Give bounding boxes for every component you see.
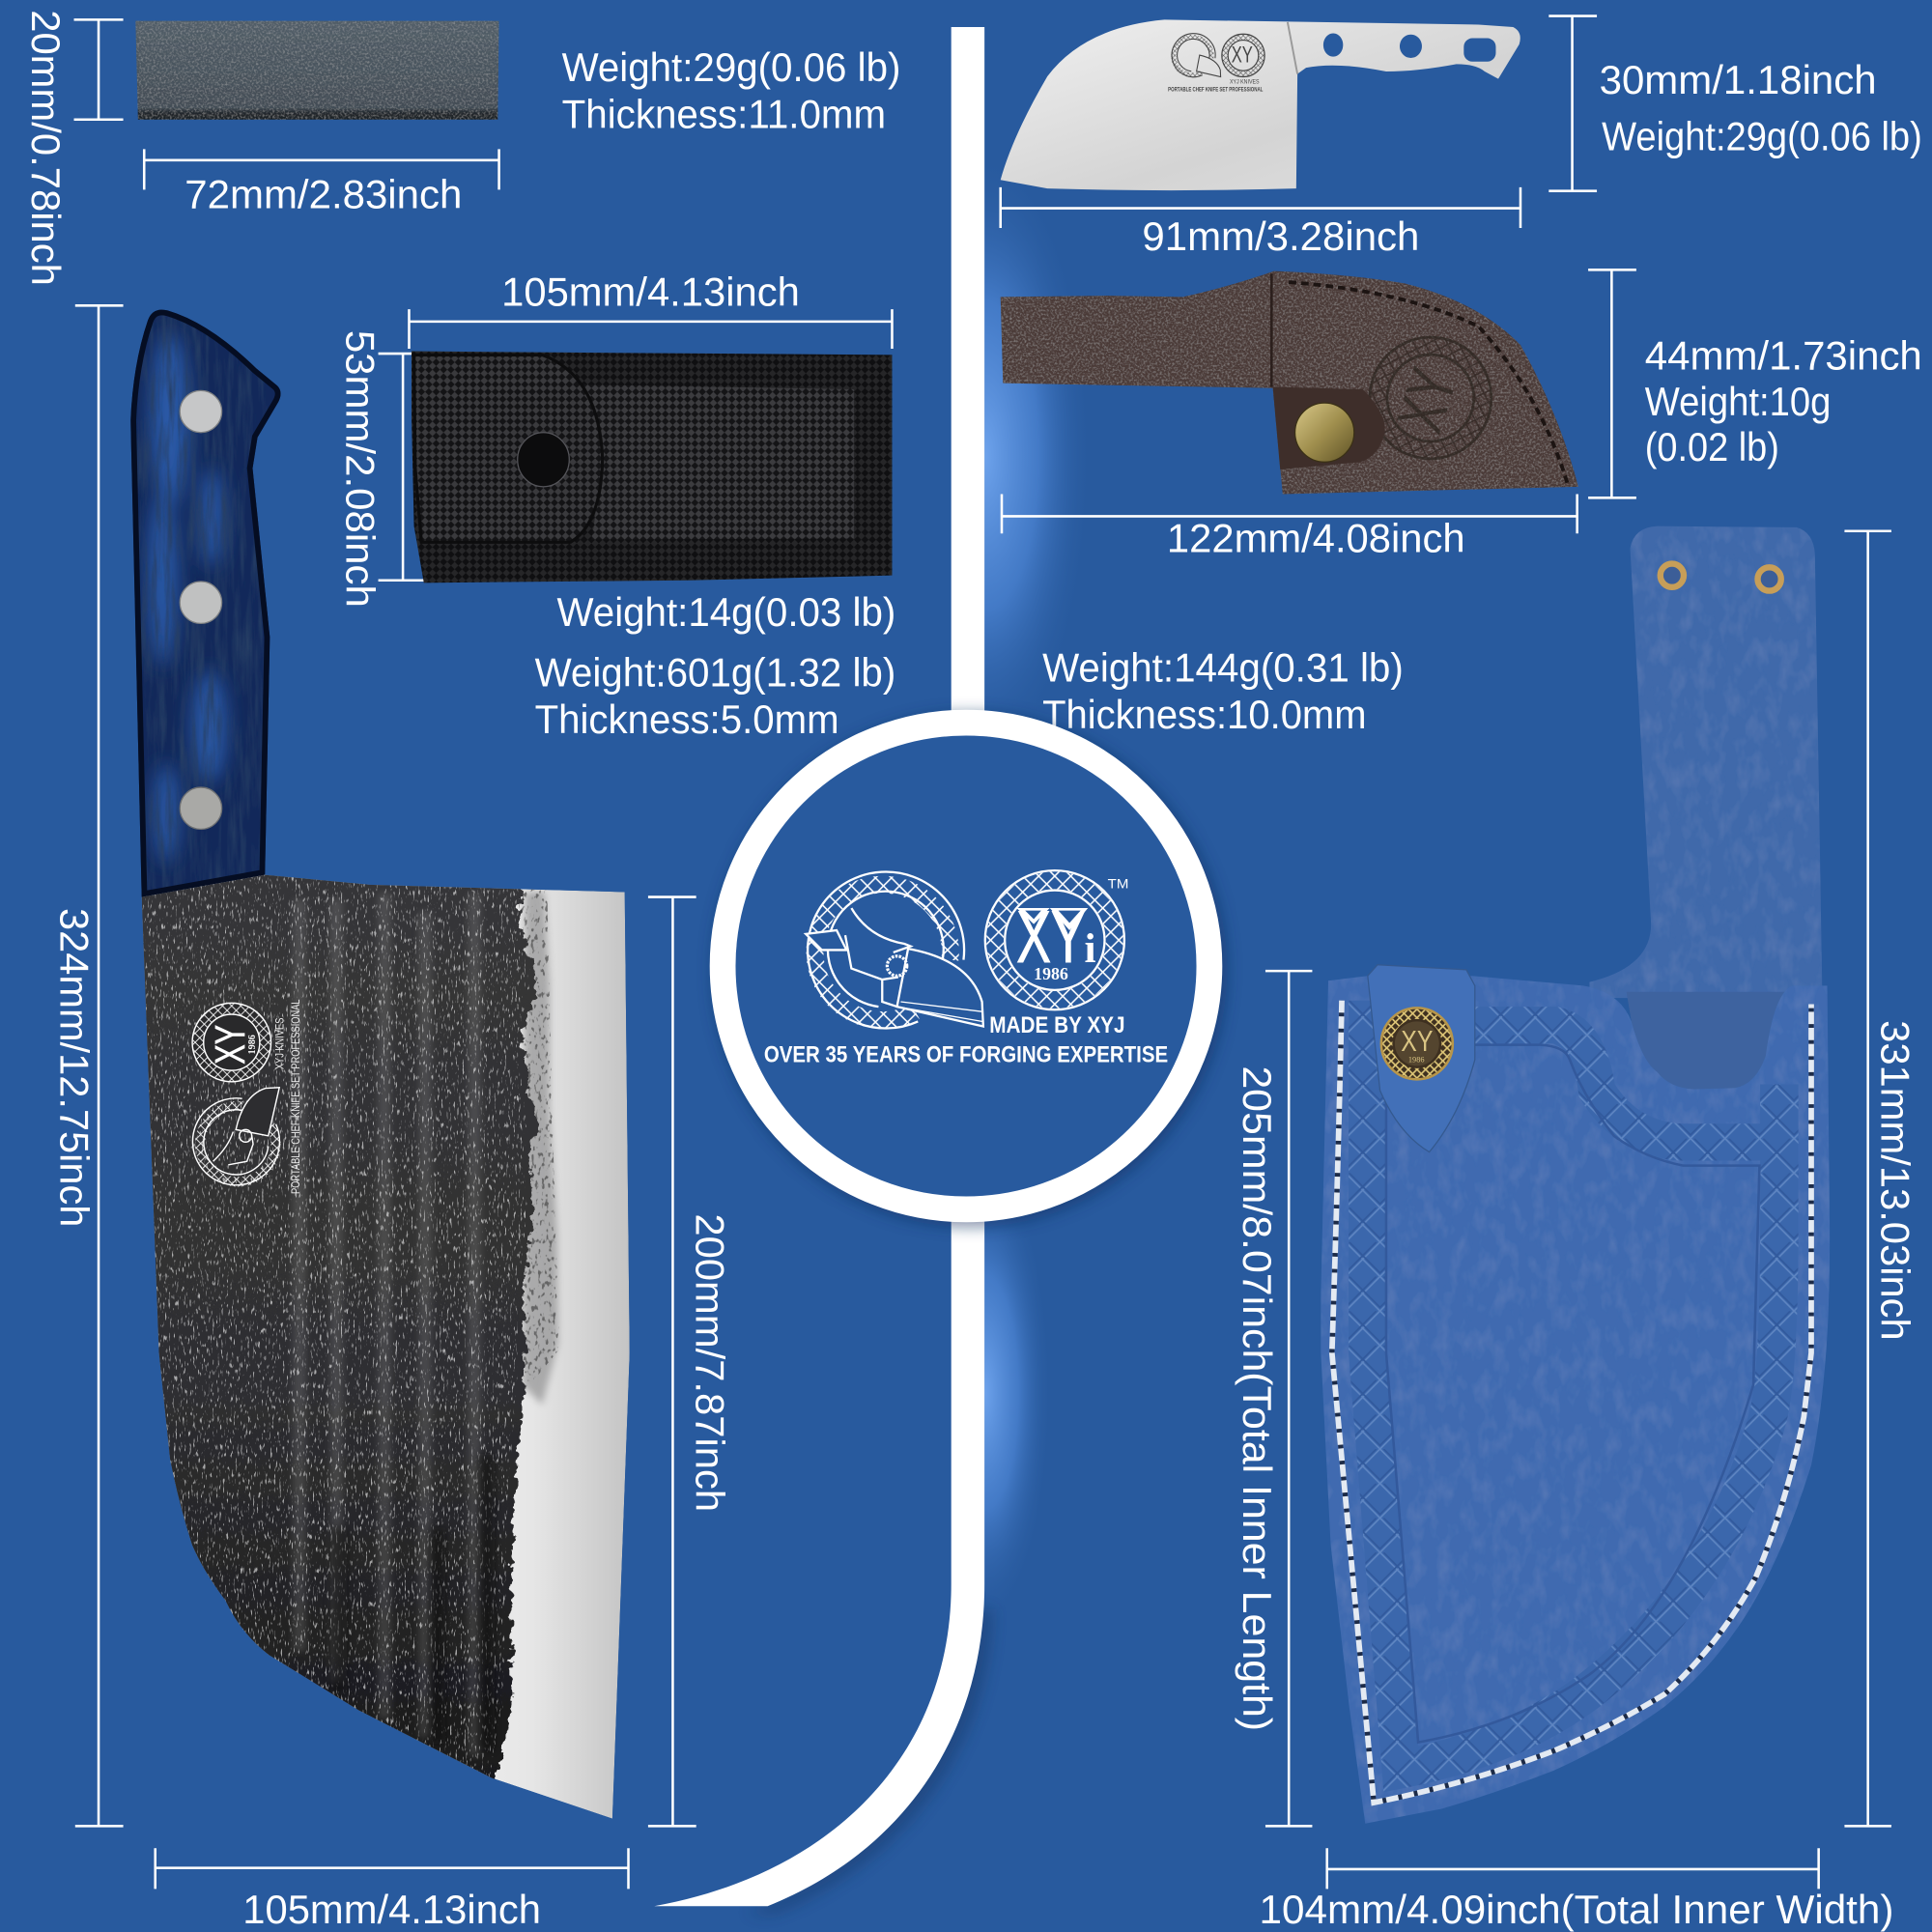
- mini knife total specs: Weight:144g(0.31 lb): [1042, 644, 1404, 690]
- mini knife body: [1001, 19, 1520, 190]
- mini height dimension: [1548, 16, 1922, 191]
- inner length dimension: 205mm/8.07inch(Total Inner Length): [1235, 1065, 1280, 1731]
- inner width dimension: 104mm/4.09inch(Total Inner Width): [1260, 1887, 1893, 1932]
- stone width dimension: [144, 149, 499, 217]
- tang seam: [1288, 22, 1297, 74]
- blade engraving text: [272, 999, 302, 1194]
- panel: black nylon sheath: [337, 269, 895, 635]
- mini logo: XYi: XY: [1232, 43, 1253, 69]
- panel: brown leather sheath: [1001, 270, 1922, 560]
- blade logo: XYi: 1986: [247, 1035, 258, 1054]
- stone body: [135, 21, 499, 120]
- stitching: [1289, 282, 1567, 483]
- panel: main cleaver: [52, 301, 895, 1932]
- pocket front: [1321, 976, 1830, 1824]
- stone specs: Thickness:11.0mm: [562, 92, 886, 137]
- logo: XYi 1986: XY: [1016, 896, 1086, 979]
- brown sheath specs: Weight:10g: [1645, 379, 1831, 424]
- inner length dimension: [1235, 971, 1312, 1826]
- stone height dimension: [23, 10, 124, 286]
- made by text: MADE BY XYJ: [989, 1012, 1125, 1038]
- height dimension: [337, 330, 425, 608]
- embossed logo: [1354, 322, 1507, 474]
- blade height dimension: [648, 897, 733, 1826]
- back strap: [1589, 526, 1822, 998]
- cleaver specs: [535, 649, 895, 742]
- embossed logo: XY: [1383, 360, 1471, 440]
- sheath body: [1001, 271, 1578, 494]
- cleaver specs: Weight:601g(1.32 lb): [535, 649, 895, 695]
- panel: mini knife: [1001, 16, 1922, 259]
- cleaver length dimension: 324mm/12.75inch: [52, 908, 97, 1227]
- height dimension: 53mm/2.08inch: [337, 330, 383, 608]
- sheath flap: [414, 355, 603, 542]
- width dimension: 105mm/4.13inch: [501, 269, 800, 314]
- width dimension: [409, 269, 892, 349]
- snap button: [518, 433, 569, 487]
- inner width dimension: [1260, 1848, 1893, 1932]
- panel: sharpening stone: [23, 10, 900, 286]
- brass logo button: [1381, 1008, 1453, 1079]
- embossed border band: [1368, 1001, 1779, 1770]
- mini engraving text: PORTABLE CHEF KNIFE SET PROFESSIONAL: [1168, 86, 1263, 93]
- mini width dimension: 91mm/3.28inch: [1142, 213, 1419, 259]
- stone width dimension: 72mm/2.83inch: [185, 172, 462, 217]
- sheath pocket panel: [579, 384, 854, 540]
- mini width dimension: [1001, 187, 1520, 259]
- blade engraving text: XYJ KNIVES: [272, 1018, 286, 1069]
- total length dimension: [1844, 531, 1918, 1826]
- logo: XYi 1986: [985, 870, 1124, 1009]
- trademark: TM: [1108, 876, 1128, 892]
- blade logo: hand: [192, 1088, 279, 1185]
- brown sheath specs: (0.02 lb): [1645, 424, 1779, 469]
- blade: [124, 863, 630, 1836]
- stone specs: [562, 44, 900, 137]
- logo: hand and cleaver: [806, 872, 983, 1029]
- ring shadow: [712, 712, 1227, 1227]
- logo: XYi 1986: 1986: [1034, 964, 1068, 983]
- blade logo: XYi: [192, 1003, 271, 1082]
- mini logo: XYi: [1222, 34, 1264, 77]
- mini engraving text: [1168, 79, 1263, 93]
- blade logo: XYi: XY: [208, 1025, 254, 1065]
- handle: [130, 309, 280, 896]
- snap flap: [1273, 387, 1385, 469]
- mini engraving text: XYJ KNIVES: [1230, 79, 1260, 86]
- brown sheath specs: 44mm/1.73inch: [1645, 333, 1922, 379]
- sheath body: [412, 352, 892, 582]
- divider shadow: [747, 1609, 992, 1914]
- stone height dimension: 20mm/0.78inch: [23, 10, 69, 286]
- blade height dimension: 200mm/7.87inch: [688, 1213, 733, 1512]
- stone specs: Weight:29g(0.06 lb): [562, 44, 900, 90]
- mini knife total specs: [1042, 644, 1404, 737]
- panel: brand badge: [723, 723, 1209, 1209]
- strap eyelets: [1661, 564, 1781, 591]
- brass logo button: XY: [1401, 1025, 1433, 1058]
- strap shadow: [1270, 273, 1272, 387]
- mini height dimension: 30mm/1.18inch: [1600, 57, 1877, 102]
- strap pocket shading: [1627, 992, 1802, 1103]
- expertise text: OVER 35 YEARS OF FORGING EXPERTISE: [764, 1041, 1168, 1067]
- snap flap: [1368, 965, 1475, 1152]
- brown sheath width dimension: [1002, 494, 1577, 560]
- mini knife total specs: Thickness:10.0mm: [1042, 692, 1367, 737]
- logo: XYi 1986: i: [1084, 925, 1095, 972]
- panel: blue leather sheath: [1235, 526, 1918, 1932]
- badge ring: [723, 723, 1209, 1209]
- brown sheath specs: [1588, 270, 1922, 497]
- brown sheath width dimension: 122mm/4.08inch: [1167, 515, 1465, 560]
- total length dimension: 331mm/13.03inch: [1873, 1020, 1918, 1341]
- curved white divider: [654, 27, 984, 1906]
- mini logo: hand: [1172, 34, 1221, 77]
- blade engraving text: PORTABLE CHEF KNIFE SET PROFESSIONAL: [289, 999, 302, 1194]
- brass logo button: 1986: [1408, 1055, 1424, 1064]
- brass snap: [1295, 403, 1354, 462]
- cleaver length dimension: [52, 305, 124, 1826]
- white stitching: [1332, 1001, 1811, 1803]
- cleaver specs: Thickness:5.0mm: [535, 696, 839, 742]
- blade width dimension: 105mm/4.13inch: [242, 1887, 541, 1932]
- divider glow: [984, 217, 1068, 1575]
- blade width dimension: [156, 1848, 629, 1932]
- sheath weight: Weight:14g(0.03 lb): [557, 589, 895, 635]
